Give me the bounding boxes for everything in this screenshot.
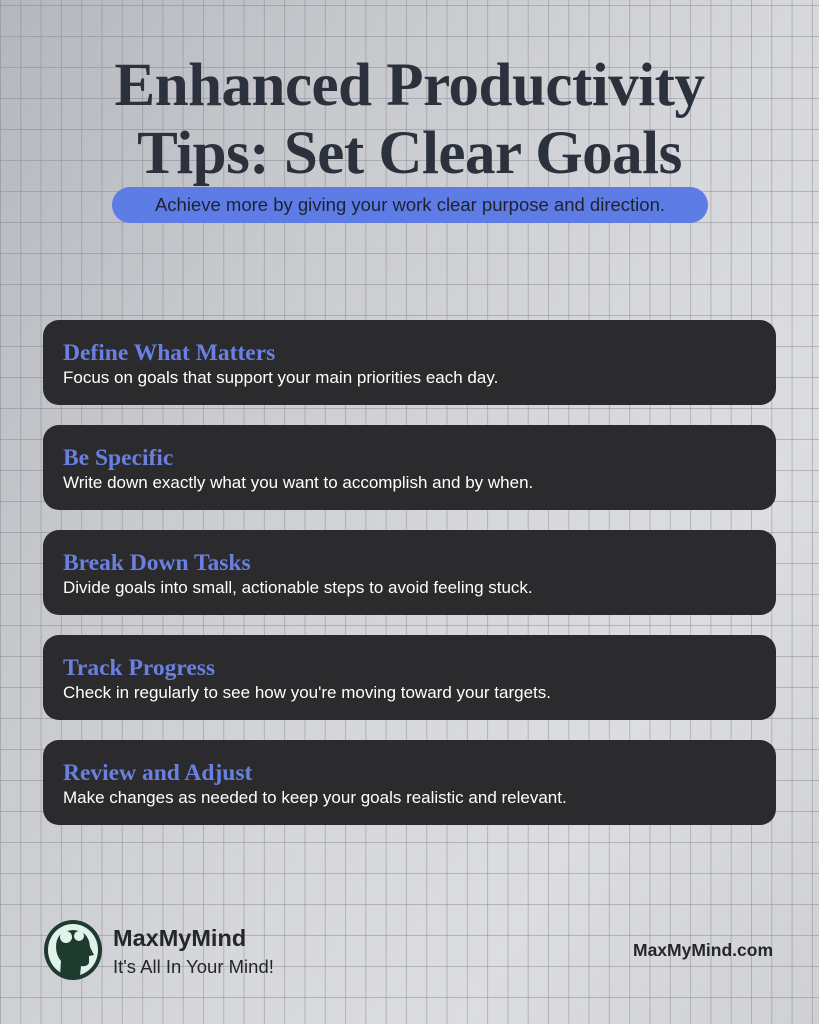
card: define what matters xyxy=(43,320,776,405)
brand text: MaxMyMind xyxy=(113,925,246,951)
card: define what matters: Focus on goals that support your main priorities each day. xyxy=(63,368,498,387)
card: break down tasks: Divide goals into small, actionable steps to avoid feeling stuck. xyxy=(63,578,533,597)
card: break down tasks: Break Down Tasks xyxy=(63,550,251,576)
subtitle pill: Achieve more by giving your work clear purpose and direction. xyxy=(155,194,665,215)
brand text: It's All In Your Mind! xyxy=(113,956,274,977)
card: define what matters: Define What Matters xyxy=(63,340,275,366)
brand text xyxy=(113,925,274,977)
card: break down tasks xyxy=(43,530,776,615)
title: Tips: Set Clear Goals xyxy=(137,120,682,187)
card: track progress: Track Progress xyxy=(63,655,215,681)
card: review and adjust: Review and Adjust xyxy=(63,760,252,786)
icon: logo xyxy=(44,920,102,980)
card: be specific: Write down exactly what you want to accomplish and by when. xyxy=(63,473,533,492)
card: be specific: Be Specific xyxy=(63,445,173,471)
card: review and adjust: Make changes as needed to keep your goals realistic and relevant. xyxy=(63,788,567,807)
card: be specific xyxy=(43,425,776,510)
card: review and adjust xyxy=(43,740,776,825)
card: track progress xyxy=(43,635,776,720)
title: Enhanced Productivity xyxy=(115,52,704,119)
subtitle pill xyxy=(112,187,708,223)
title xyxy=(115,52,704,187)
card: track progress: Check in regularly to see how you're moving toward your targets. xyxy=(63,683,551,702)
website: MaxMyMind.com xyxy=(633,940,773,960)
